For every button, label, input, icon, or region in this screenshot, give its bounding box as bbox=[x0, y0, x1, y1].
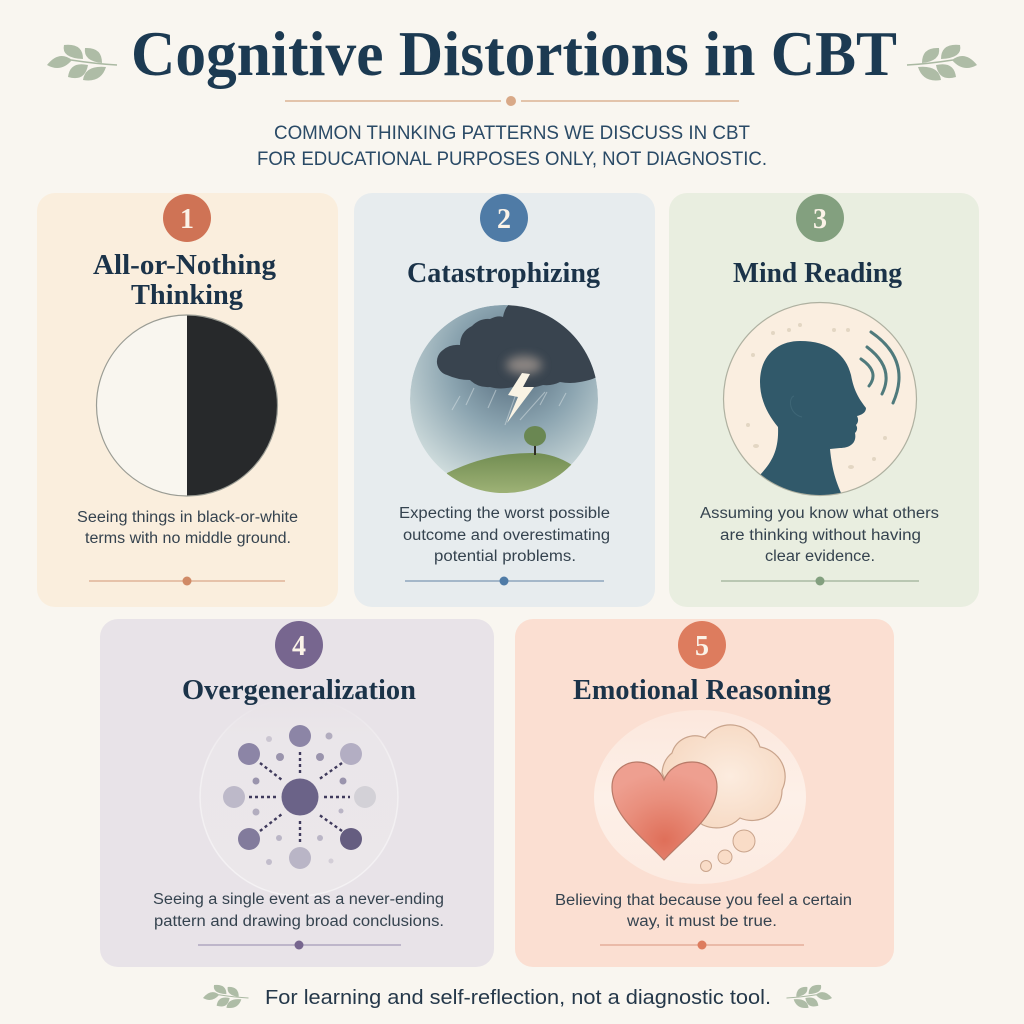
description: pattern and drawing broad conclusions. bbox=[154, 913, 444, 930]
description: Expecting the worst possible bbox=[399, 505, 610, 522]
icon: left laurel sprig bbox=[47, 45, 117, 80]
description bbox=[700, 505, 939, 565]
heading: All-or-Nothing bbox=[93, 249, 276, 281]
icon: hub with dashed spokes bbox=[200, 698, 398, 896]
icon: heart and thought cloud bbox=[594, 710, 806, 884]
subtitle: FOR EDUCATIONAL PURPOSES ONLY, NOT DIAGNOSTIC. bbox=[257, 149, 767, 170]
heading: Overgeneralization bbox=[182, 674, 416, 706]
description: Assuming you know what others bbox=[700, 505, 939, 522]
description: way, it must be true. bbox=[626, 913, 777, 930]
description: terms with no middle ground. bbox=[85, 530, 291, 547]
badge 5: 5 bbox=[695, 631, 709, 662]
icon: storm cloud over hill bbox=[410, 302, 605, 500]
heading: Mind Reading bbox=[733, 257, 902, 289]
description: potential problems. bbox=[434, 548, 576, 565]
description bbox=[399, 505, 610, 565]
icon: footer left sprig bbox=[203, 985, 248, 1008]
badge 1 bbox=[163, 194, 211, 242]
panel: mind reading bbox=[669, 193, 979, 607]
description: clear evidence. bbox=[765, 548, 875, 565]
badge 5 bbox=[678, 621, 726, 669]
icon: footer right sprig bbox=[786, 985, 832, 1008]
icon: head silhouette with sound waves bbox=[724, 302, 916, 500]
description: are thinking without having bbox=[720, 527, 921, 544]
description bbox=[77, 509, 298, 547]
badge 3 bbox=[796, 194, 844, 242]
description bbox=[153, 891, 444, 930]
subtitle: COMMON THINKING PATTERNS WE DISCUSS IN CBT bbox=[274, 123, 750, 144]
subtitle bbox=[257, 123, 767, 170]
description: Believing that because you feel a certain bbox=[555, 892, 852, 909]
panel: all-or-nothing thinking bbox=[37, 193, 338, 607]
description: outcome and overestimating bbox=[403, 527, 610, 544]
title divider bbox=[285, 96, 739, 106]
badge 2: 2 bbox=[497, 204, 511, 235]
badge 3: 3 bbox=[813, 204, 827, 235]
panel: emotional reasoning bbox=[515, 619, 894, 967]
badge 2 bbox=[480, 194, 528, 242]
heading bbox=[93, 249, 276, 311]
badge 4 bbox=[275, 621, 323, 669]
description: Seeing a single event as a never-ending bbox=[153, 891, 444, 908]
panel: overgeneralization bbox=[100, 619, 494, 967]
footer note: For learning and self-reflection, not a diagnostic tool. bbox=[265, 986, 771, 1009]
badge 4: 4 bbox=[292, 631, 306, 662]
title: Cognitive Distortions in CBT bbox=[131, 19, 897, 89]
icon: right laurel sprig bbox=[907, 45, 977, 80]
panel: catastrophizing bbox=[354, 193, 655, 607]
heading: Emotional Reasoning bbox=[573, 674, 831, 706]
description bbox=[555, 892, 852, 930]
badge 1: 1 bbox=[180, 204, 194, 235]
description: Seeing things in black-or-white bbox=[77, 509, 298, 526]
heading: Thinking bbox=[131, 279, 243, 311]
icon: half white half black circle bbox=[96, 315, 278, 496]
heading: Catastrophizing bbox=[407, 257, 600, 289]
